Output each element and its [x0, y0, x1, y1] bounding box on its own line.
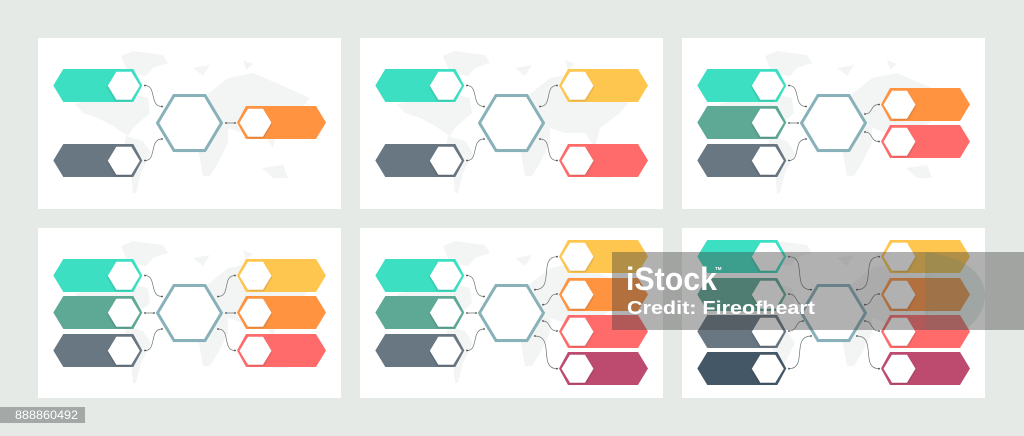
watermark credit: Credit: Fireofheart	[627, 298, 815, 318]
bar: yellow	[559, 240, 648, 273]
central hexagon	[480, 96, 544, 152]
bar: green	[53, 296, 142, 329]
bar: teal	[53, 69, 142, 102]
bar: coral	[237, 334, 326, 367]
bar: slate	[697, 144, 786, 177]
bar: coral	[559, 315, 648, 348]
bar: magenta	[559, 352, 648, 385]
bar: teal	[375, 69, 464, 102]
trademark sign: TM	[715, 266, 722, 271]
bar: orange	[881, 278, 970, 311]
panel: four left options, four right	[682, 228, 985, 398]
connectors	[466, 256, 558, 370]
bar: navy	[697, 352, 786, 385]
panel: one centre hexagon with three options	[38, 38, 341, 209]
connectors	[788, 85, 880, 161]
bar: magenta	[881, 352, 970, 385]
connectors	[466, 85, 558, 161]
bar: slate	[697, 315, 786, 348]
bar: yellow	[881, 240, 970, 273]
central hexagon	[802, 286, 866, 342]
panel: three left options, two right	[682, 38, 985, 209]
bar: coral	[881, 315, 970, 348]
connectors	[144, 275, 236, 351]
central hexagon	[158, 96, 222, 152]
bar: slate	[375, 334, 464, 367]
watermark band	[612, 252, 1024, 330]
bar: orange	[559, 278, 648, 311]
watermark logo: iStock	[626, 261, 717, 297]
bar: yellow	[237, 259, 326, 292]
panel: three left options, four right	[360, 228, 663, 398]
image id badge	[0, 407, 85, 423]
bar: slate	[53, 334, 142, 367]
image id badge: 888860492	[15, 410, 78, 422]
bar: coral	[881, 125, 970, 158]
bar: green	[375, 296, 464, 329]
bar: teal	[53, 259, 142, 292]
watermark curved tint	[925, 252, 985, 330]
bar: orange	[881, 88, 970, 121]
central hexagon	[158, 286, 222, 342]
bar: green	[697, 106, 786, 139]
bar: slate	[53, 144, 142, 177]
bar: teal	[697, 240, 786, 273]
central hexagon	[802, 96, 866, 152]
bar: green	[697, 278, 786, 311]
connectors	[144, 85, 236, 161]
bar: yellow	[559, 69, 648, 102]
bar: coral	[559, 144, 648, 177]
connectors	[788, 256, 880, 370]
bar: orange	[237, 106, 326, 139]
central hexagon	[480, 286, 544, 342]
panel: one centre hexagon with four options, two right	[360, 38, 663, 209]
bar: teal	[697, 69, 786, 102]
bar: orange	[237, 296, 326, 329]
bar: slate	[375, 144, 464, 177]
panel: three left options, three right	[38, 228, 341, 398]
bar: teal	[375, 259, 464, 292]
